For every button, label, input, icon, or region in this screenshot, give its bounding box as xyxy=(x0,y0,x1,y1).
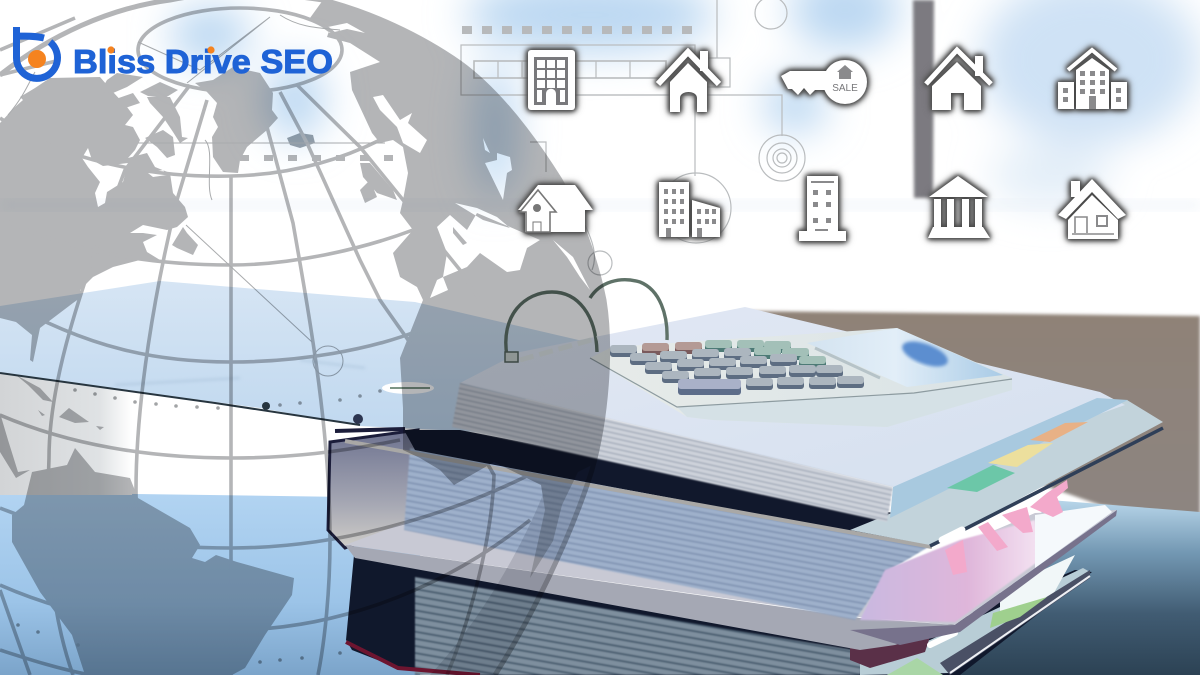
light blue open folder xyxy=(0,281,600,432)
green tabs xyxy=(990,597,1047,628)
islands: Britain and Ireland xyxy=(360,163,397,203)
calculator keys xyxy=(610,340,864,395)
icon: two office blocks xyxy=(659,182,720,237)
continent: North America xyxy=(0,77,188,362)
islands: Italy xyxy=(453,227,467,245)
logo wordmark: Bliss Drive SEO xyxy=(73,43,333,80)
dotted globe arcs xyxy=(16,388,382,664)
continent: Eurasia and Africa xyxy=(310,0,607,578)
icon: simple house xyxy=(926,50,991,110)
continent: South America xyxy=(12,448,294,675)
maroon binder edge xyxy=(850,637,930,668)
concentric target circles xyxy=(759,135,805,181)
window frame xyxy=(913,0,934,198)
binder rings xyxy=(505,280,667,362)
folder edge xyxy=(0,373,360,425)
bottom binder with dark red cover xyxy=(346,553,1092,675)
icon: apartment building xyxy=(1058,50,1127,109)
icon: outlined house xyxy=(1058,179,1126,239)
infographic line art behind the icons xyxy=(461,0,805,275)
calculator display xyxy=(807,328,1003,387)
icon: sale key xyxy=(781,60,867,104)
blue table on the right xyxy=(930,500,1200,675)
dashes at top of globe xyxy=(240,155,393,161)
continent: Arctic islands xyxy=(100,73,198,255)
island: Iceland xyxy=(287,133,315,148)
coloured index tabs xyxy=(947,465,1015,492)
pink page edges xyxy=(860,520,1040,622)
pink tabs xyxy=(945,480,1068,575)
icon: house with chimney xyxy=(658,51,719,112)
globe grid lines xyxy=(0,0,608,675)
top binder cover bars xyxy=(335,400,1163,547)
meridians xyxy=(229,176,233,675)
calculator xyxy=(590,328,1012,427)
land: Central America and Caribbean xyxy=(0,375,104,478)
folder hole xyxy=(382,382,434,394)
icon: cottage xyxy=(518,185,593,232)
logo i dots xyxy=(107,46,215,54)
square dash row xyxy=(462,26,692,34)
logo mark xyxy=(16,27,57,78)
globe outline xyxy=(0,0,608,675)
parallels xyxy=(0,118,380,176)
icon: tower block xyxy=(799,176,846,241)
bottom binder cover and pages at right xyxy=(860,568,1090,675)
continent: Greenland xyxy=(195,67,278,173)
logo xyxy=(16,27,333,80)
stack of paper on top binder xyxy=(452,307,1128,522)
brown wall behind the binders xyxy=(745,311,1200,520)
icon: bank with columns xyxy=(928,176,990,238)
icon: office tower xyxy=(528,50,575,110)
icon: sale key: SALE xyxy=(832,83,858,94)
thin globe construction lines xyxy=(8,15,385,376)
polar parallel xyxy=(138,8,342,92)
middle binder with grey spine and pages xyxy=(328,430,1117,650)
blue desk surface on the left xyxy=(0,492,420,675)
globe soft crescent tint xyxy=(430,300,606,675)
globe: continents and grid xyxy=(0,0,608,675)
white band and grey side area between folder and desk xyxy=(0,370,132,495)
